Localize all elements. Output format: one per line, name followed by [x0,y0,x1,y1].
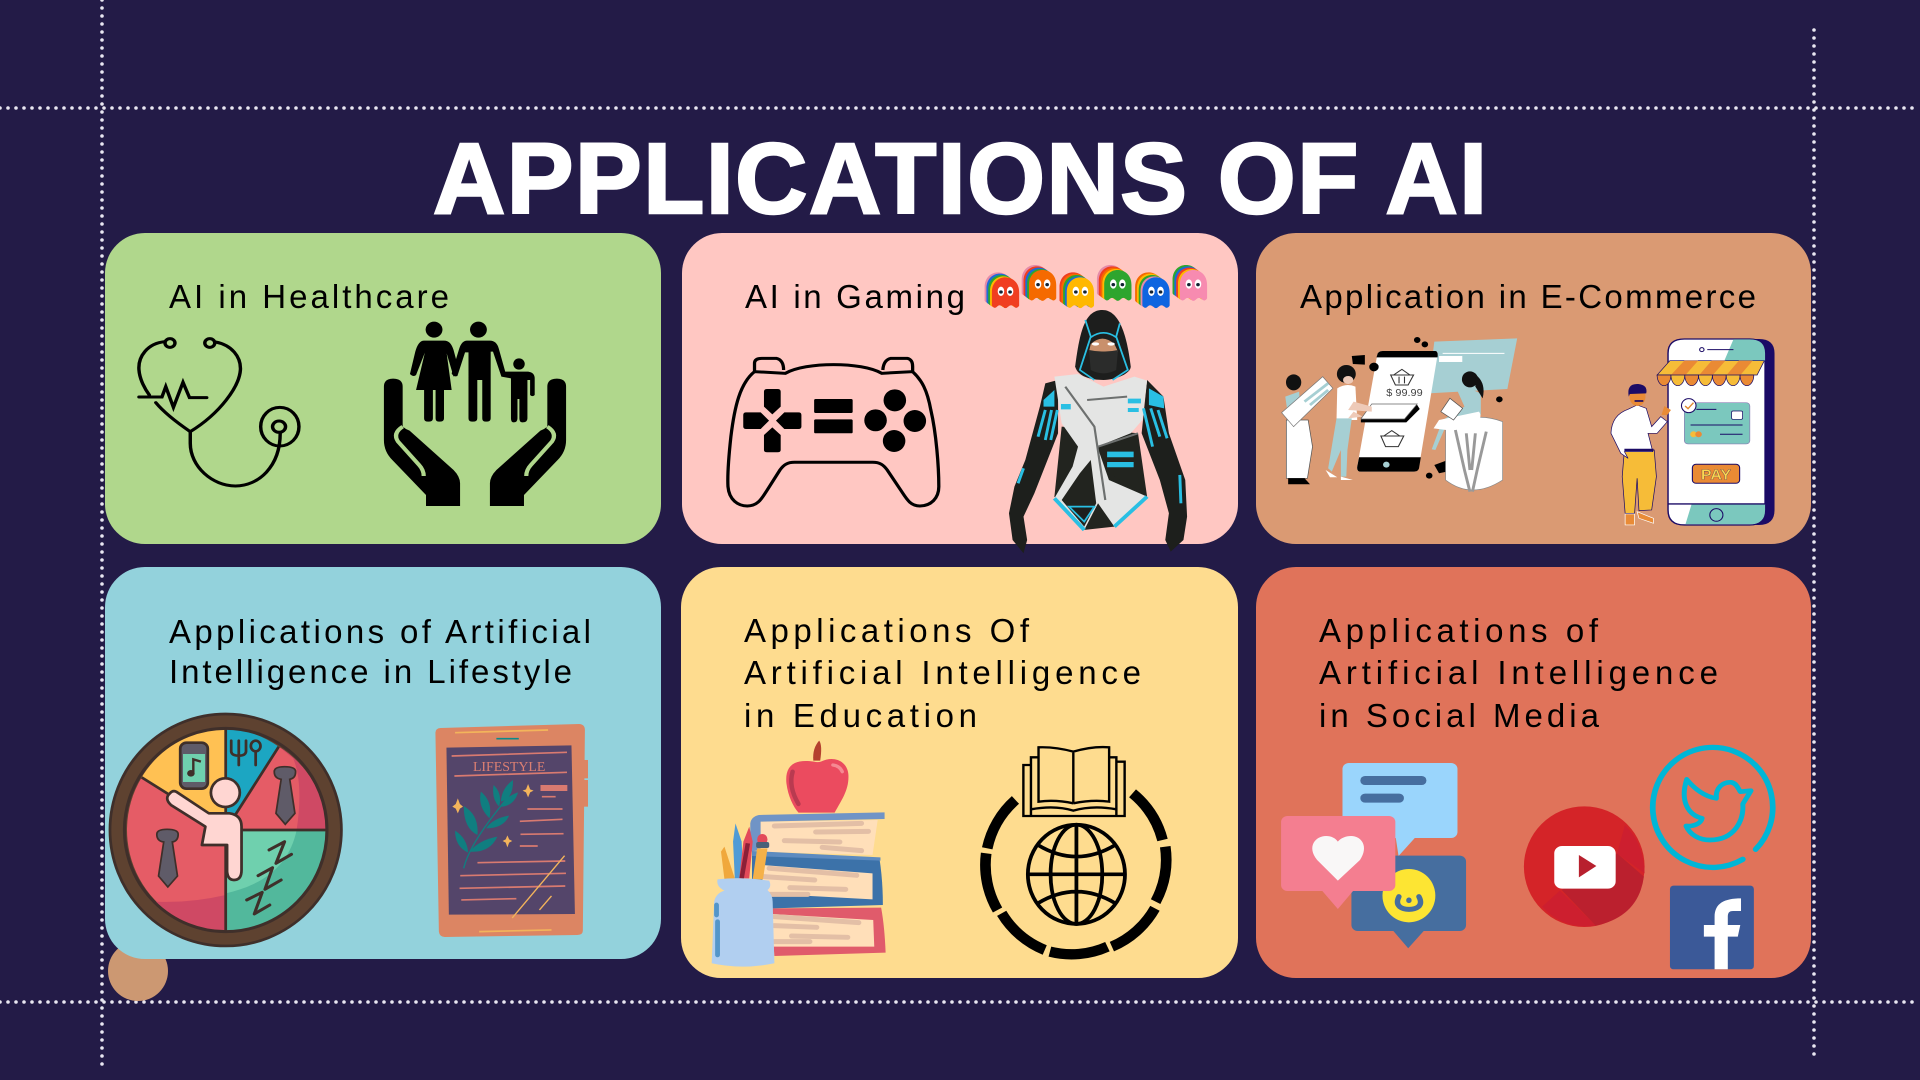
illustration: hooded game character [1009,310,1187,553]
heading: social media: in Social Media [1319,697,1600,734]
icon: stethoscope [139,339,299,486]
heading: lifestyle: Applications of Artificial [169,613,591,650]
heading: healthcare: AI in Healthcare [169,278,449,315]
heading: education: Artificial Intelligence [744,654,1141,691]
heading: education: Applications Of [744,612,1030,649]
panel: Application in E-Commerce [1256,233,1811,544]
heading: social media: Applications of [1319,612,1599,649]
panel: AI in Healthcare [105,233,661,544]
heading: social media: Artificial Intelligence [1319,654,1718,691]
panel: AI in Lifestyle [105,567,661,959]
icon: Facebook [1670,886,1754,969]
illustration: shop-in-a-phone with pay button: PAY [1701,467,1731,483]
heading: gaming: AI in Gaming [745,278,965,315]
illustration: lifestyle magazine tablet: LIFESTYLE [473,760,545,775]
icon: daily routine pie wheel [110,714,341,946]
heading: education: in Education [744,697,977,734]
icon: book and globe with ring [985,747,1166,954]
heading: education [744,612,1141,734]
icon: chat bubbles [1281,763,1466,948]
heading: social media [1319,612,1718,734]
panel: AI in Social Media [1256,567,1811,978]
illustration: lifestyle magazine tablet [435,724,588,937]
heading: e-commerce: Application in E-Commerce [1300,278,1756,315]
icon: game controller [728,358,939,506]
panel: AI in Education [681,567,1238,978]
icon: rainbow ghosts [985,265,1207,308]
heading: lifestyle: Intelligence in Lifestyle [169,653,572,690]
icon: YouTube [1524,806,1645,927]
illustration: online shopping team: $ 99.99 [1386,388,1423,399]
icon: family in caring hands [384,322,566,506]
heading: lifestyle [169,613,591,690]
panel: AI in Gaming [682,233,1238,553]
illustration: books, apple and pencils [712,741,886,967]
title: APPLICATIONS OF AI [433,123,1487,235]
decorative peach circle [108,941,168,1001]
icon: Twitter [1653,747,1773,867]
illustration: shop-in-a-phone with pay button [1611,339,1775,525]
illustration: online shopping team [1282,337,1517,492]
